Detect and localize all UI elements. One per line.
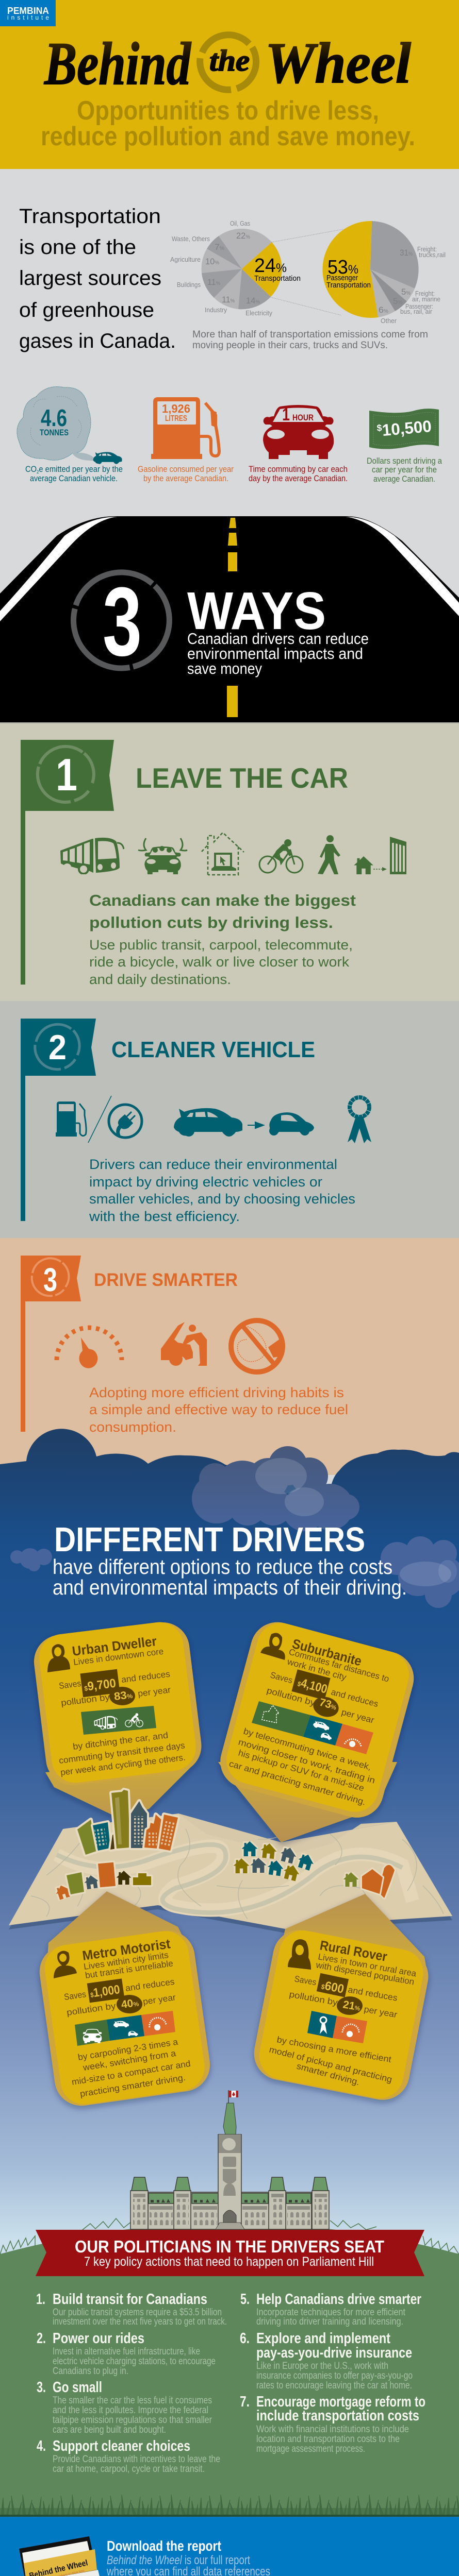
policy 7: location and transportation costs to the [256, 2434, 400, 2445]
heading: cleaner vehicle: CLEANER VEHICLE [111, 1037, 315, 1062]
text: adopting more efficient driving habits: Adopting more efficient driving habits is [89, 1385, 344, 1400]
stat: $10,500 green bill: average Canadian. [373, 474, 435, 484]
heading: different drivers: DIFFERENT DRIVERS [54, 1520, 365, 1559]
card content: metro motorist: practicing smarter driving. [79, 2073, 186, 2099]
icons: skyline windows [94, 1797, 176, 1848]
icon: ribbon [348, 1097, 371, 1143]
heading: WAYS: WAYS [187, 581, 326, 640]
text: use public transit: and daily destinations. [89, 972, 231, 987]
card content: metro motorist: pollution by [66, 2001, 117, 2018]
card content: metro motorist: $1,000 [89, 1982, 121, 2001]
policy 7 [240, 2394, 425, 2454]
stat: 1,926 litres gas pump: LITRES [165, 414, 187, 423]
chart: pie of Canadian emissions by sector: Industry [205, 306, 227, 314]
card content: urban dweller [47, 1633, 186, 1777]
card: suburbanite [215, 1616, 420, 1842]
policy 3 [37, 2379, 212, 2435]
list: policy actions right [240, 2291, 425, 2454]
chart: pie of Canadian emissions by sector [170, 219, 301, 317]
text: more than half of transportation emissions: More than half of transportation emissions come from [192, 329, 428, 340]
icon: walker [318, 835, 340, 874]
list: policy actions left [36, 2291, 227, 2475]
stat: $10,500 green bill: car per year for the [372, 465, 437, 474]
policy 7: Work with financial institutions to include [256, 2424, 409, 2435]
policy 6: rates to encourage leaving the car at home. [256, 2380, 412, 2391]
stat: 1 hour red car: Time commuting by car each [249, 464, 348, 474]
card content: suburbanite: his pickup or SUV for a mid-size [237, 1748, 365, 1793]
text: adopting more efficient driving habits: a simple and effective way to reduce fuel [89, 1402, 348, 1417]
card content: metro motorist: per year [142, 1992, 176, 2007]
card content: suburbanite: work in the city [286, 1656, 348, 1683]
stat: 1,926 litres gas pump: Gasoline consumed per year [138, 464, 234, 474]
subtitle: reduce pollution and save money. [41, 122, 415, 151]
banner: our politicians [36, 2230, 424, 2276]
heading: leave the car: LEAVE THE CAR [136, 762, 348, 794]
text: canadians can make the biggest pollution cuts [89, 891, 356, 931]
text: use public transit: Use public transit, carpool, telecommute, [89, 937, 353, 953]
card content: urban dweller: Urban Dweller [71, 1633, 158, 1659]
icon: canadian flag [229, 2091, 238, 2097]
flag 1 [21, 740, 114, 985]
text: download the report [106, 2538, 270, 2576]
chart: pie of Canadian emissions by sector: Waste, Others [172, 235, 210, 243]
policy 4: car at home, carpool, cycle or take transit. [53, 2464, 205, 2475]
chart: pie of transportation emissions: Other [381, 317, 397, 325]
card content: urban dweller: per year [137, 1685, 171, 1699]
card content: suburbanite: pollution by [266, 1686, 317, 1708]
policy 2: Power our rides [53, 2330, 144, 2347]
icon: speedometer [57, 1328, 122, 1368]
peace tower [216, 2090, 244, 2229]
chart: pie of Canadian emissions by sector: Agriculture [170, 256, 201, 263]
chart connector lines [271, 229, 343, 315]
card content: urban dweller: and reduces [121, 1669, 171, 1685]
policy 6: pay-as-you-drive insurance [256, 2345, 412, 2361]
text: drivers can reduce: impact by driving electric vehicles or [89, 1174, 322, 1190]
stat: 1 hour red car: day by the average Canadian. [249, 473, 348, 483]
stat: 4.6 tonnes cloud: e emitted per year by the [39, 464, 123, 474]
card content: rural rover: Lives in town or rural area [317, 1952, 417, 1979]
text: drivers can reduce [89, 1157, 355, 1224]
policy 2: 2. [37, 2330, 46, 2347]
policy 2: electric vehicle charging stations, to encourage [53, 2356, 216, 2367]
card content: metro motorist: 40% [120, 1996, 140, 2011]
policy 6: 6. [240, 2330, 250, 2347]
policy 2: Canadians to plug in. [53, 2366, 128, 2377]
chart: pie of transportation emissions: 6% [379, 305, 388, 315]
policy 1 [36, 2291, 227, 2327]
policy 6 [240, 2330, 413, 2391]
map [9, 1814, 452, 1933]
card content: rural rover: Saves [293, 1974, 317, 1987]
icon: carpool car [138, 838, 187, 874]
chart: pie of transportation emissions: 53% [327, 257, 358, 278]
policy 3: and the less it pollutes. Improve the federal [53, 2405, 208, 2416]
policy 1: investment over the next five years to get on track. [53, 2316, 227, 2327]
card content: suburbanite: Commutes far distances to [288, 1647, 390, 1684]
stat: 4.6 tonnes cloud: average Canadian vehicle. [30, 473, 118, 483]
policy 7: include transportation costs [256, 2408, 419, 2424]
subtitle: Opportunities to drive less, [77, 96, 379, 126]
card content: metro motorist: Metro Motorist [81, 1936, 171, 1963]
chart: pie of Canadian emissions by sector: Transportation [254, 274, 301, 283]
chart: pie of transportation emissions: Passenger: [405, 302, 433, 310]
chart: pie of transportation emissions: Freight: [417, 245, 437, 253]
grass tufts on hill [0, 2218, 459, 2255]
card content: metro motorist: mid-size to a compact car and [71, 2059, 191, 2087]
chart: pie of transportation emissions: 31% [400, 248, 413, 258]
policy 3: Go small [53, 2379, 102, 2396]
policy 2: Invest in alternative fuel infrastructure, like [53, 2346, 200, 2357]
title: Behind the Wheel: Wheel [265, 31, 411, 95]
card content: metro motorist: by carpooling 2-3 times a [77, 2037, 179, 2062]
card content: suburbanite: and reduces [330, 1687, 380, 1709]
stat: $10,500 green bill: $ [376, 422, 382, 433]
heading: drive smarter: DRIVE SMARTER [94, 1270, 238, 1290]
title: Behind the Wheel: the [209, 44, 250, 77]
text: have different options: and environmental impacts of their driving. [53, 1575, 407, 1599]
card content: rural rover: pollution by [288, 1989, 339, 2008]
policy 5: 5. [240, 2291, 250, 2308]
logo: Pembina Institute [0, 0, 56, 26]
road centre dashes [227, 518, 238, 717]
chart: pie of Canadian emissions by sector: 14% [246, 296, 260, 306]
policy 5 [240, 2291, 421, 2327]
card content: rural rover: by choosing a more efficient [276, 2035, 392, 2064]
chart: pie of transportation emissions: trucks,rail [419, 251, 446, 259]
icon: pump slash plug [56, 1096, 142, 1143]
policy 1: 1. [36, 2291, 45, 2308]
policy 6: Explore and implement [256, 2330, 390, 2347]
card content: suburbanite: moving closer to work, trading in [237, 1737, 376, 1786]
policy 1: Our public transit systems require a $53.5 billion [53, 2307, 222, 2318]
card content: suburbanite: per year [340, 1707, 375, 1725]
chart: pie of transportation emissions: Transportation [326, 281, 371, 290]
illustration: parliament peace tower [130, 2090, 329, 2229]
stat: $10,500 green bill: Dollars spent driving a [367, 456, 442, 466]
card: rural rover [250, 1894, 433, 2105]
stat: 1,926 litres gas pump: by the average Canadian. [143, 473, 228, 483]
heading: transportation is one of the largest sources: Transportation [19, 205, 161, 228]
chart: pie of transportation emissions: 5% [393, 296, 402, 306]
card content: suburbanite: $4,100 [296, 1675, 329, 1697]
panel: grey transportation section [0, 169, 459, 722]
icons: inner suburb buildings [54, 1862, 151, 1901]
chart: pie of Canadian emissions by sector: 22% [236, 231, 250, 241]
stat: 4.6 tonnes cloud: 4.6 [41, 404, 67, 431]
card content: rural rover: model of pickup and practicing [268, 2044, 393, 2084]
icon: SUV to small car [174, 1108, 314, 1137]
logo: Pembina Institute: PEMBINA [7, 6, 49, 16]
stat: $10,500 green bill [367, 409, 442, 484]
policy 4: Support cleaner choices [53, 2438, 190, 2454]
text: adopting more efficient driving habits [89, 1385, 348, 1435]
stat: 4.6 tonnes cloud: TONNES [40, 428, 69, 437]
text: drivers can reduce: with the best efficiency. [89, 1209, 240, 1224]
text: canadian drivers can reduce [187, 630, 369, 677]
stat: 4.6 tonnes cloud: CO [25, 464, 38, 474]
icon: bus [60, 838, 124, 874]
chart: pie of Canadian emissions by sector: 24% [254, 255, 287, 277]
icons: downtown skyline [77, 1790, 178, 1855]
card content: urban dweller: Lives in downtown core [73, 1647, 164, 1667]
chart: pie of Canadian emissions by sector: 7% [215, 242, 224, 252]
policy 7: mortgage assessment process. [256, 2444, 365, 2454]
icon: house moving closer to building [354, 837, 406, 874]
icons: suburban houses [233, 1841, 316, 1882]
policy 7: 7. [240, 2394, 250, 2410]
flag 1: 1 [56, 749, 77, 800]
chart: pie of Canadian emissions by sector: 11% [222, 295, 235, 304]
policy 6: Like in Europe or the U.S., work with [256, 2361, 388, 2371]
stat: 1,926 litres gas pump: 1,926 [162, 402, 190, 415]
heading: transportation is one of the largest sources: gases in Canada. [19, 330, 176, 352]
policy 5: driving into driver training and licensing. [256, 2316, 403, 2327]
policy 1: Build transit for Canadians [53, 2291, 207, 2308]
policy 3: 3. [37, 2379, 46, 2396]
policy 6: insurance companies to offer pay-as-you-go [256, 2370, 413, 2381]
card content: suburbanite: car and practicing smarter driving. [228, 1759, 367, 1807]
icon: no idling [231, 1320, 283, 1372]
card content: metro motorist: Lives within city limits [83, 1950, 169, 1972]
panel: sky with clouds [0, 1429, 459, 2267]
heading: transportation is one of the largest sources: of greenhouse [19, 299, 154, 321]
title: Behind the Wheel: Behind [43, 30, 192, 97]
icon: wheel ring behind title [200, 35, 256, 90]
chart: pie of transportation emissions: Freight: [415, 290, 435, 297]
text: more than half of transportation emissions: moving people in their cars, trucks and SUVs. [192, 340, 388, 351]
panel: footer [0, 2517, 459, 2576]
clouds: small left cloud [10, 1548, 52, 1571]
card content: urban dweller: per week and cycling the others. [60, 1752, 186, 1777]
chart: pie of Canadian emissions by sector: Oil, Gas [230, 219, 250, 227]
card content: rural rover: Rural Rover [319, 1937, 388, 1964]
chart: pie of Canadian emissions by sector: 10% [205, 257, 219, 266]
icons: rural house and barn [343, 1865, 395, 1898]
chart: pie of Canadian emissions by sector: Buildings [177, 281, 201, 289]
text: more than half of transportation emissions [192, 329, 428, 351]
card: metro motorist [36, 1891, 214, 2109]
icon: ring around 3 [74, 572, 169, 668]
banner: our politicians: 7 key policy actions that need to happen on Parliament Hill [84, 2255, 374, 2269]
text: canadians can make the biggest pollution cuts: Canadians can make the biggest [89, 891, 356, 909]
card content: rural rover: and reduces [347, 1985, 398, 2003]
card content: urban dweller: by ditching the car, and [72, 1730, 169, 1752]
icon: cyclist [259, 839, 303, 873]
card content: urban dweller: pollution by [60, 1692, 110, 1708]
text: download the report: Behind the Wheel is our full report [107, 2553, 250, 2567]
icon: telecommute house [202, 833, 244, 875]
text: use public transit: ride a bicycle, walk or live closer to work [89, 954, 350, 970]
chart: pie of transportation emissions: Passenger [326, 274, 358, 282]
stat: 4.6 tonnes cloud [17, 386, 123, 483]
panel: 1 leave the car [0, 722, 459, 1001]
title: Behind the Wheel [43, 30, 411, 97]
flag 2 [21, 1019, 96, 1221]
card content: rural rover: per year [363, 2004, 398, 2020]
text: canadian drivers can reduce: environmental impacts and [187, 645, 363, 663]
grass strip [0, 2494, 459, 2517]
text: canadian drivers can reduce: Canadian drivers can reduce [187, 630, 369, 648]
chart: pie of Canadian emissions by sector: Electricity [245, 309, 272, 317]
logo: Pembina Institute: institute [7, 14, 49, 21]
icon: mechanic under the hood [161, 1322, 207, 1366]
hill [0, 2218, 459, 2515]
wings and roofs [130, 2177, 329, 2229]
card content: suburbanite [228, 1633, 390, 1807]
panel: yellow header [0, 0, 459, 169]
flag 3 [21, 1256, 81, 1432]
stat: 4.6 tonnes cloud: 2 [37, 469, 39, 474]
card content: metro motorist: Saves [63, 1989, 87, 2002]
chart: pie of transportation emissions: air, marine [412, 295, 440, 303]
card content: metro motorist [54, 1936, 191, 2099]
flag 2: 2 [48, 1028, 67, 1067]
card content: urban dweller: Saves [58, 1679, 81, 1691]
policy 2 [37, 2330, 216, 2377]
text: have different options [53, 1555, 407, 1599]
text: canadians can make the biggest pollution cuts: pollution cuts by driving less. [89, 913, 333, 931]
policy 4: 4. [37, 2438, 46, 2454]
text: adopting more efficient driving habits: consumption. [89, 1419, 176, 1435]
heading: transportation is one of the largest sources: largest sources [19, 267, 161, 290]
card content: rural rover: 21% [342, 1998, 362, 2013]
chart: pie of transportation emissions [322, 221, 446, 325]
heading: transportation is one of the largest sources [19, 205, 176, 352]
card content: suburbanite: Suburbanite [290, 1636, 364, 1669]
card content: metro motorist: but transit is unreliable [85, 1958, 174, 1980]
report cover [19, 2536, 108, 2576]
policy 3: cars are being built and bought. [53, 2425, 166, 2435]
flag 3: 3 [43, 1261, 57, 1298]
card: urban dweller [31, 1619, 204, 1819]
card content: suburbanite: 73% [318, 1697, 338, 1713]
card content: urban dweller: 83% [113, 1689, 134, 1703]
text: download the report: Download the report [107, 2538, 221, 2554]
stat: 1 hour red car: HOUR [292, 413, 314, 422]
stat: 1 hour red car: 1 [282, 405, 290, 425]
card content: urban dweller: commuting by transit three days [58, 1740, 186, 1766]
road with 3 ways [0, 516, 459, 722]
card content: urban dweller: $9,700 [83, 1676, 117, 1694]
text: use public transit [89, 937, 353, 987]
card content: suburbanite: by telecommuting twice a week, [242, 1726, 372, 1772]
text: drivers can reduce: Drivers can reduce their environmental [89, 1157, 337, 1172]
policy 3: The smaller the car the less fuel it consumes [53, 2395, 212, 2406]
policy 3: tailpipe emission regulations so that smaller [53, 2415, 212, 2426]
clouds: central cloud [192, 1446, 359, 1531]
card content: rural rover: with dispersed population [315, 1960, 415, 1987]
card content: rural rover: smarter driving. [296, 2061, 361, 2087]
subtitle [41, 96, 415, 151]
panel: 3 drive smarter [0, 1238, 459, 1475]
road with 3 ways: 3 [103, 567, 142, 676]
policy 4 [37, 2438, 220, 2475]
card content: metro motorist: and reduces [125, 1977, 175, 1993]
card content: rural rover: $600 [320, 1978, 345, 1996]
text: drivers can reduce: smaller vehicles, and by choosing vehicles [89, 1191, 355, 1207]
chart: pie of Canadian emissions by sector: 11% [207, 277, 220, 287]
chart: pie of transportation emissions: bus, rail, air [400, 308, 433, 315]
chart: pie of transportation emissions: 5% [401, 287, 411, 297]
policy 5: Incorporate techniques for more efficient [256, 2307, 406, 2318]
heading: transportation is one of the largest sources: is one of the [19, 236, 136, 259]
stat: 1 hour red car [249, 405, 348, 483]
card content: metro motorist: week, switching from a [82, 2048, 177, 2073]
policy 4: Provide Canadians with incentives to leave the [53, 2454, 220, 2465]
panel: 2 cleaner vehicle [0, 1001, 459, 1238]
stat: $10,500 green bill: 10,500 [381, 417, 432, 439]
text: canadian drivers can reduce: save money [187, 659, 262, 677]
clouds: right cloud [381, 1536, 459, 1608]
banner: our politicians: OUR POLITICIANS IN THE DRIVERS SEAT [75, 2237, 384, 2256]
card content: suburbanite: Saves [269, 1670, 293, 1685]
text: have different options: have different options to reduce the costs [53, 1555, 392, 1579]
card content: rural rover [268, 1937, 417, 2087]
stat: 1,926 litres gas pump [138, 397, 234, 483]
